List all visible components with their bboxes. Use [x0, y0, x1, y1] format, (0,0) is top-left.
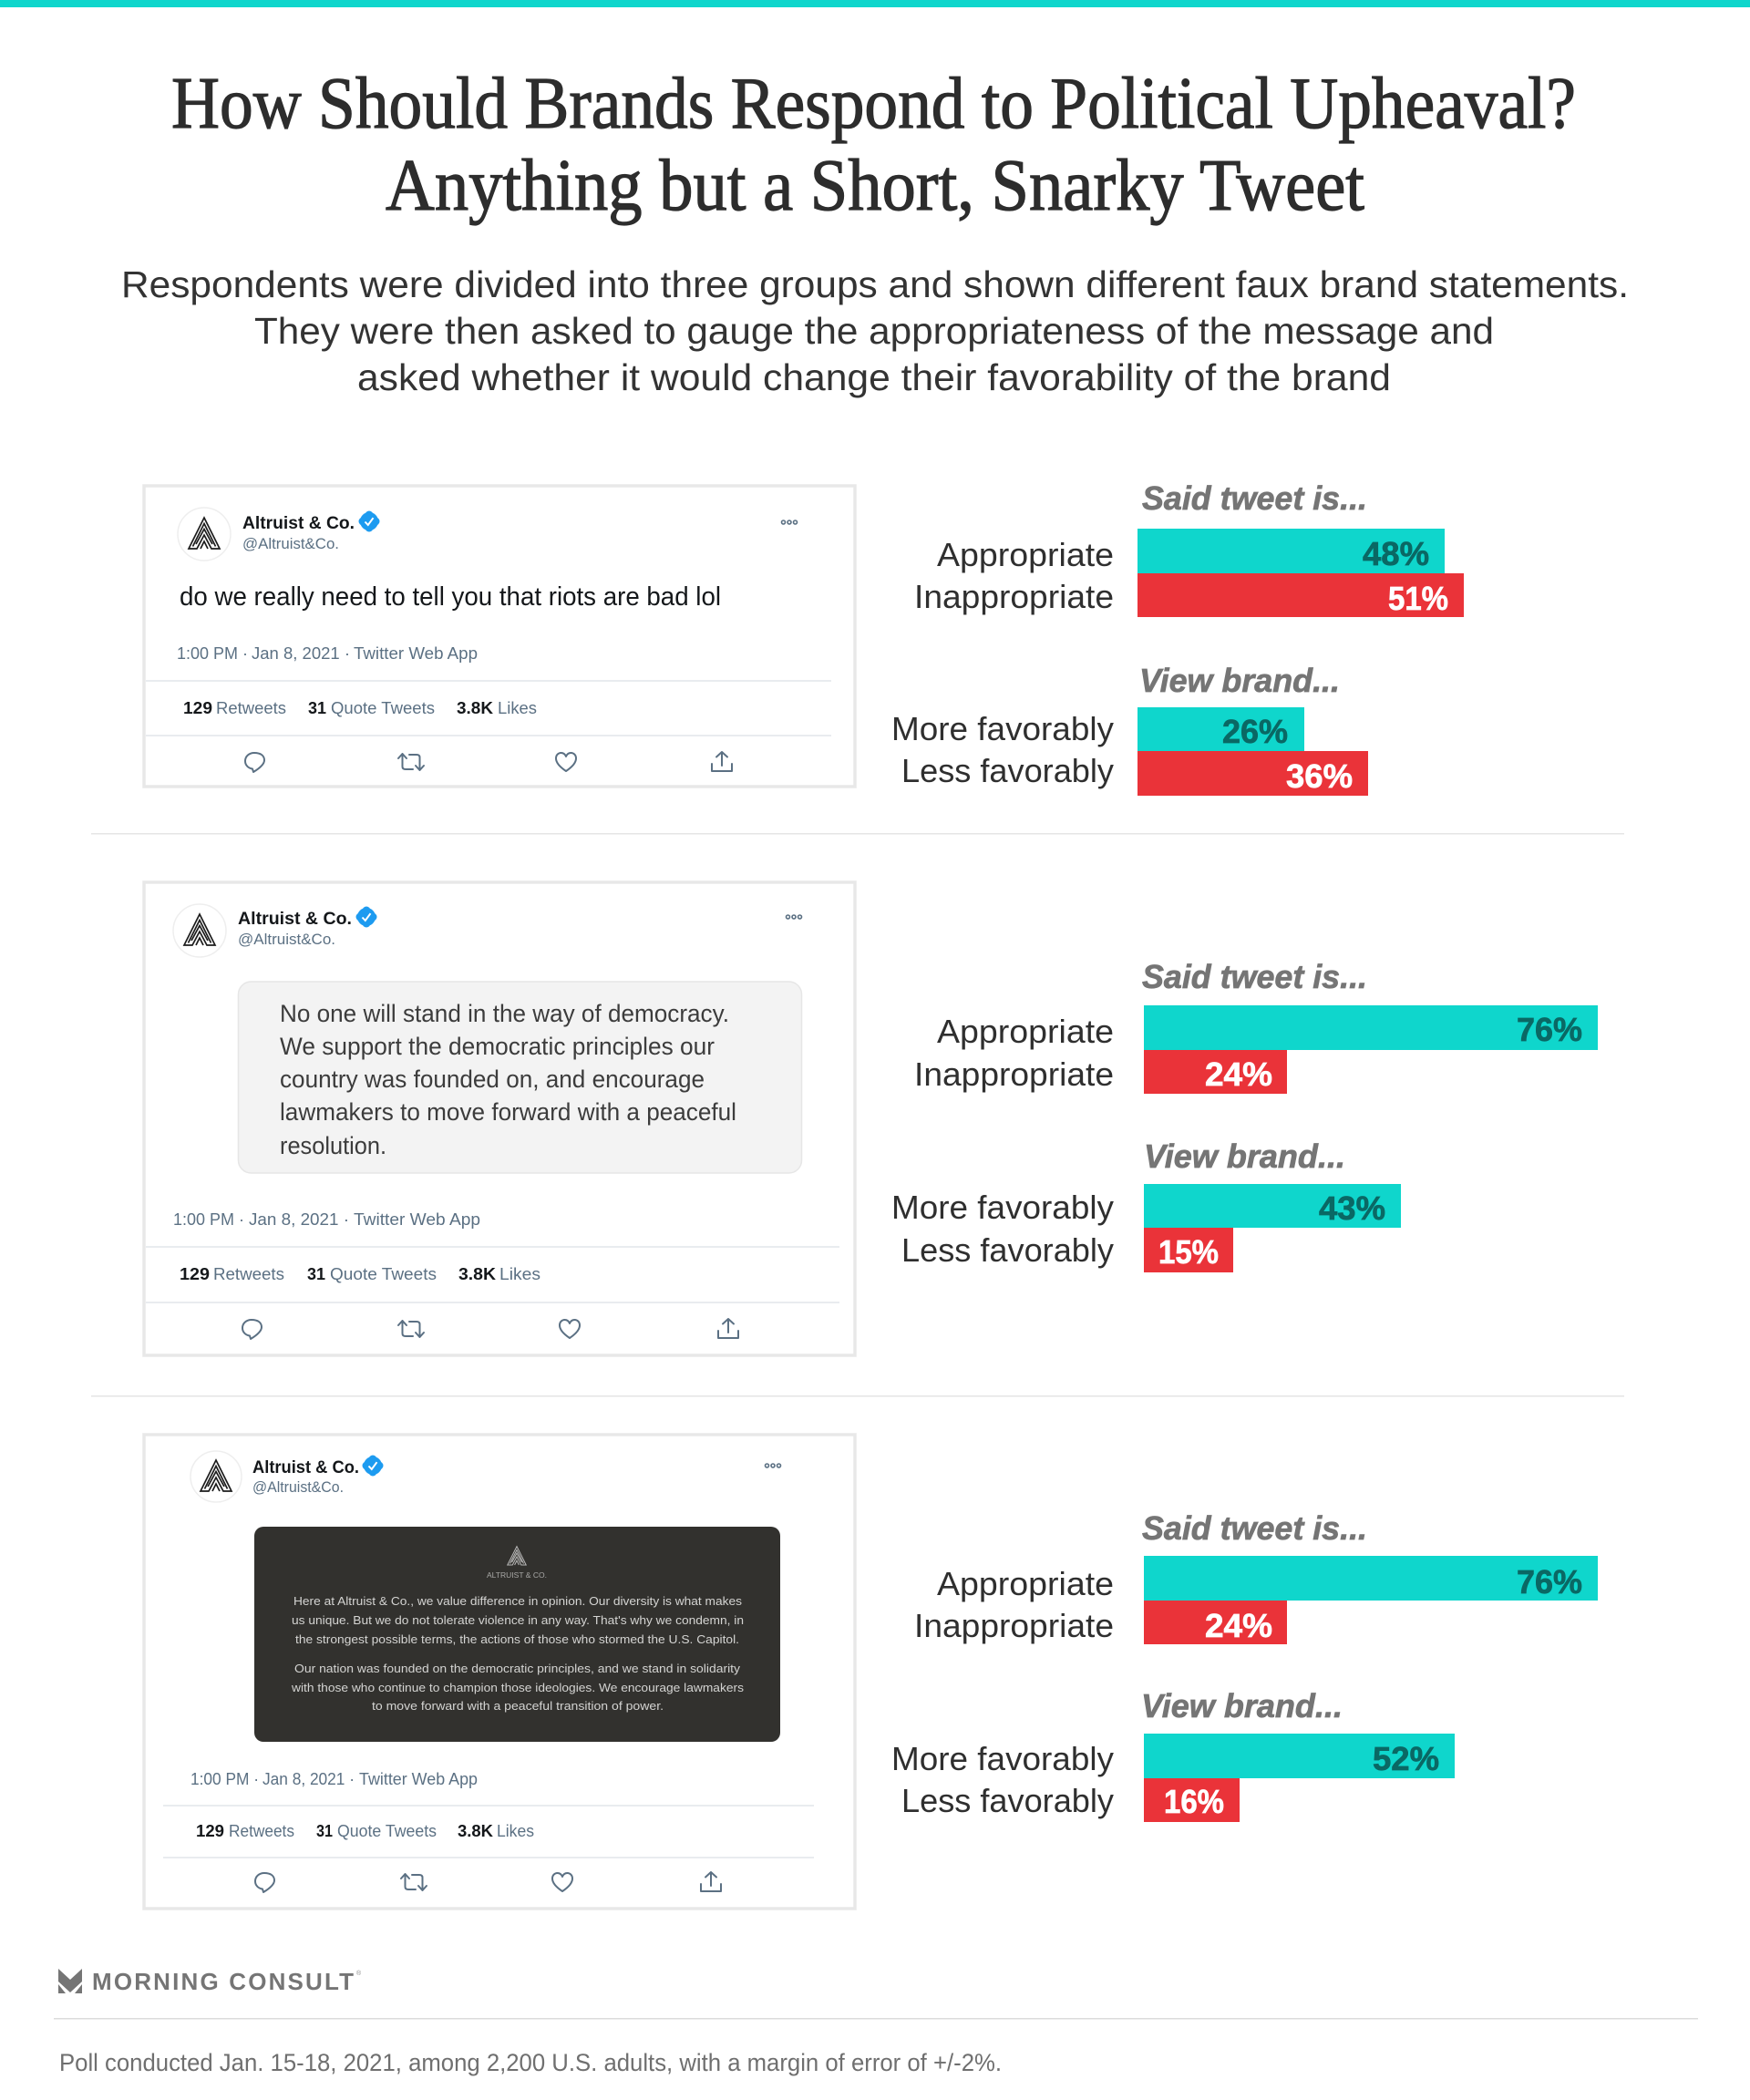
engagement stats [196, 1822, 534, 1840]
label: appropriate: Appropriate [937, 536, 1114, 573]
wordmark: MORNING CONSULT [92, 1968, 354, 1995]
value 52%: 52% [1373, 1740, 1439, 1777]
panel: tweet 1 [144, 486, 855, 787]
bar: less favorably 16% [1144, 1778, 1240, 1822]
value 43%: 43% [1319, 1189, 1385, 1227]
panel: tweet 3 [144, 1435, 855, 1909]
avatar [178, 508, 231, 561]
label: appropriate: Appropriate [937, 1565, 1114, 1602]
timestamp: 1:00 PM · [190, 1770, 259, 1788]
card statement text: us unique. But we do not tolerate violence in any way. That's why we condemn, in [292, 1614, 744, 1627]
bar: less favorably 36% [1138, 751, 1368, 796]
timestamp: Jan 8, 2021 · [252, 644, 350, 663]
bar: less favorably 15% [1144, 1228, 1233, 1272]
card logo [508, 1547, 526, 1565]
bar: more favorably 26% [1138, 707, 1304, 751]
statement card [239, 982, 802, 1173]
subtitle: Respondents were divided into three groups and shown different faux brand statements. [121, 263, 1629, 305]
statement card: resolution. [280, 1132, 386, 1159]
action icons [245, 752, 732, 772]
bar: appropriate 48% [1138, 529, 1445, 573]
label: less favorably: Less favorably [901, 1231, 1114, 1269]
engagement stats: 3.8K [458, 1822, 493, 1840]
registered mark: ® [356, 1970, 362, 1977]
verified badge [359, 510, 379, 532]
card statement text: with those who continue to champion those ideologies. We encourage lawmakers [291, 1682, 744, 1694]
engagement stats: Likes [498, 699, 537, 717]
engagement stats: Retweets [213, 1265, 284, 1283]
handle: @Altruist&Co. [242, 535, 339, 552]
card statement text: Our nation was founded on the democratic principles, and we stand in solidarity [294, 1662, 741, 1675]
heading: view brand: View brand... [1139, 662, 1340, 699]
engagement stats: 3.8K [458, 1265, 496, 1283]
engagement stats: 129 [180, 1265, 210, 1283]
timestamp: Twitter Web App [359, 1770, 478, 1788]
engagement stats: 129 [196, 1822, 224, 1840]
timestamp: 1:00 PM · [173, 1210, 244, 1229]
engagement stats: Likes [499, 1265, 540, 1283]
handle: @Altruist&Co. [252, 1478, 344, 1496]
bar: appropriate 76% [1144, 1005, 1598, 1050]
label: more favorably: More favorably [891, 710, 1114, 747]
card brand: ALTRUIST & CO. [487, 1570, 547, 1580]
value 48%: 48% [1363, 535, 1429, 572]
timestamp [177, 644, 478, 663]
more menu [766, 1464, 780, 1467]
engagement stats: Quote Tweets [337, 1822, 437, 1840]
engagement stats: 31 [316, 1822, 333, 1840]
timestamp: Twitter Web App [354, 1210, 480, 1229]
engagement stats: Likes [497, 1822, 534, 1840]
account name: Altruist & Co. [238, 910, 352, 929]
engagement stats [183, 699, 537, 717]
bar: inappropriate 51% [1138, 573, 1464, 617]
value 16%: 16% [1164, 1783, 1224, 1820]
heading: said tweet is: Said tweet is... [1142, 1509, 1367, 1547]
value 51%: 51% [1388, 580, 1448, 617]
label: inappropriate: Inappropriate [914, 578, 1114, 615]
card statement text: the strongest possible terms, the actions of those who stormed the U.S. Capitol. [295, 1633, 739, 1646]
value 26%: 26% [1222, 713, 1288, 750]
panel: tweet 2 [144, 882, 855, 1355]
verified badge [355, 906, 377, 928]
footnote: Poll conducted Jan. 15-18, 2021, among 2,200 U.S. adults, with a margin of error of +/-2%. [59, 2049, 1002, 2076]
title [171, 64, 1576, 226]
engagement stats [180, 1265, 540, 1283]
label: appropriate: Appropriate [937, 1013, 1114, 1050]
statement image card [254, 1527, 780, 1742]
action icons [242, 1319, 738, 1339]
label: less favorably: Less favorably [901, 752, 1114, 789]
value 15%: 15% [1158, 1233, 1219, 1271]
bar: more favorably 43% [1144, 1184, 1401, 1228]
engagement stats: Retweets [229, 1822, 294, 1840]
action icons [255, 1872, 721, 1892]
title: Anything but a Short, Snarky Tweet [386, 146, 1364, 226]
engagement stats: 129 [183, 699, 212, 717]
engagement stats: Quote Tweets [331, 699, 435, 717]
statement card: No one will stand in the way of democracy. [280, 1000, 729, 1027]
account name: Altruist & Co. [242, 514, 355, 533]
more menu [786, 915, 802, 919]
logo mark [58, 1969, 82, 1993]
avatar [173, 904, 226, 957]
card statement text [291, 1595, 744, 1713]
verified badge [363, 1455, 383, 1477]
heading: view brand: View brand... [1144, 1138, 1345, 1175]
statement card: country was founded on, and encourage [280, 1065, 705, 1093]
chart: tweet 2 results [891, 958, 1598, 1272]
label: inappropriate: Inappropriate [914, 1607, 1114, 1644]
label: more favorably: More favorably [891, 1740, 1114, 1777]
footer logo: Morning Consult [58, 1968, 362, 1995]
timestamp: 1:00 PM · [177, 644, 248, 663]
more menu [782, 520, 797, 524]
label: less favorably: Less favorably [901, 1782, 1114, 1819]
heading: said tweet is: Said tweet is... [1142, 479, 1367, 517]
tweet text: do we really need to tell you that riots are bad lol [180, 582, 721, 612]
chart: tweet 1 results [891, 479, 1464, 796]
statement card: lawmakers to move forward with a peaceful [280, 1098, 736, 1126]
engagement stats: 31 [307, 1265, 325, 1283]
chart: tweet 3 results [891, 1509, 1598, 1822]
value 76%: 76% [1517, 1011, 1582, 1048]
bar: appropriate 76% [1144, 1556, 1598, 1601]
timestamp [173, 1210, 480, 1229]
top accent bar [0, 0, 1750, 7]
label: inappropriate: Inappropriate [914, 1055, 1114, 1093]
engagement stats: Retweets [216, 699, 286, 717]
bar: inappropriate 24% [1144, 1601, 1287, 1644]
statement card: We support the democratic principles our [280, 1033, 715, 1060]
timestamp: Twitter Web App [354, 644, 478, 663]
subtitle [121, 263, 1629, 398]
value 36%: 36% [1286, 757, 1353, 795]
title: How Should Brands Respond to Political Upheaval? [171, 64, 1576, 144]
engagement stats: 31 [308, 699, 326, 717]
account name: Altruist & Co. [252, 1458, 359, 1477]
handle: @Altruist&Co. [238, 931, 335, 948]
heading: said tweet is: Said tweet is... [1142, 958, 1367, 995]
timestamp: Jan 8, 2021 · [249, 1210, 349, 1229]
value 24%: 24% [1205, 1055, 1272, 1093]
timestamp [190, 1770, 478, 1788]
heading: view brand: View brand... [1141, 1687, 1343, 1724]
label: more favorably: More favorably [891, 1189, 1114, 1226]
bar: inappropriate 24% [1144, 1050, 1287, 1094]
value 24%: 24% [1205, 1607, 1272, 1644]
bar: more favorably 52% [1144, 1734, 1455, 1778]
card statement text: Here at Altruist & Co., we value difference in opinion. Our diversity is what makes [293, 1595, 742, 1608]
engagement stats: 3.8K [457, 699, 493, 717]
timestamp: Jan 8, 2021 · [262, 1770, 355, 1788]
subtitle: asked whether it would change their favorability of the brand [357, 356, 1391, 398]
engagement stats: Quote Tweets [330, 1265, 437, 1283]
subtitle: They were then asked to gauge the appropriateness of the message and [254, 310, 1494, 352]
card statement text: to move forward with a peaceful transition of power. [372, 1700, 664, 1713]
avatar [190, 1451, 242, 1502]
value 76%: 76% [1517, 1563, 1582, 1601]
